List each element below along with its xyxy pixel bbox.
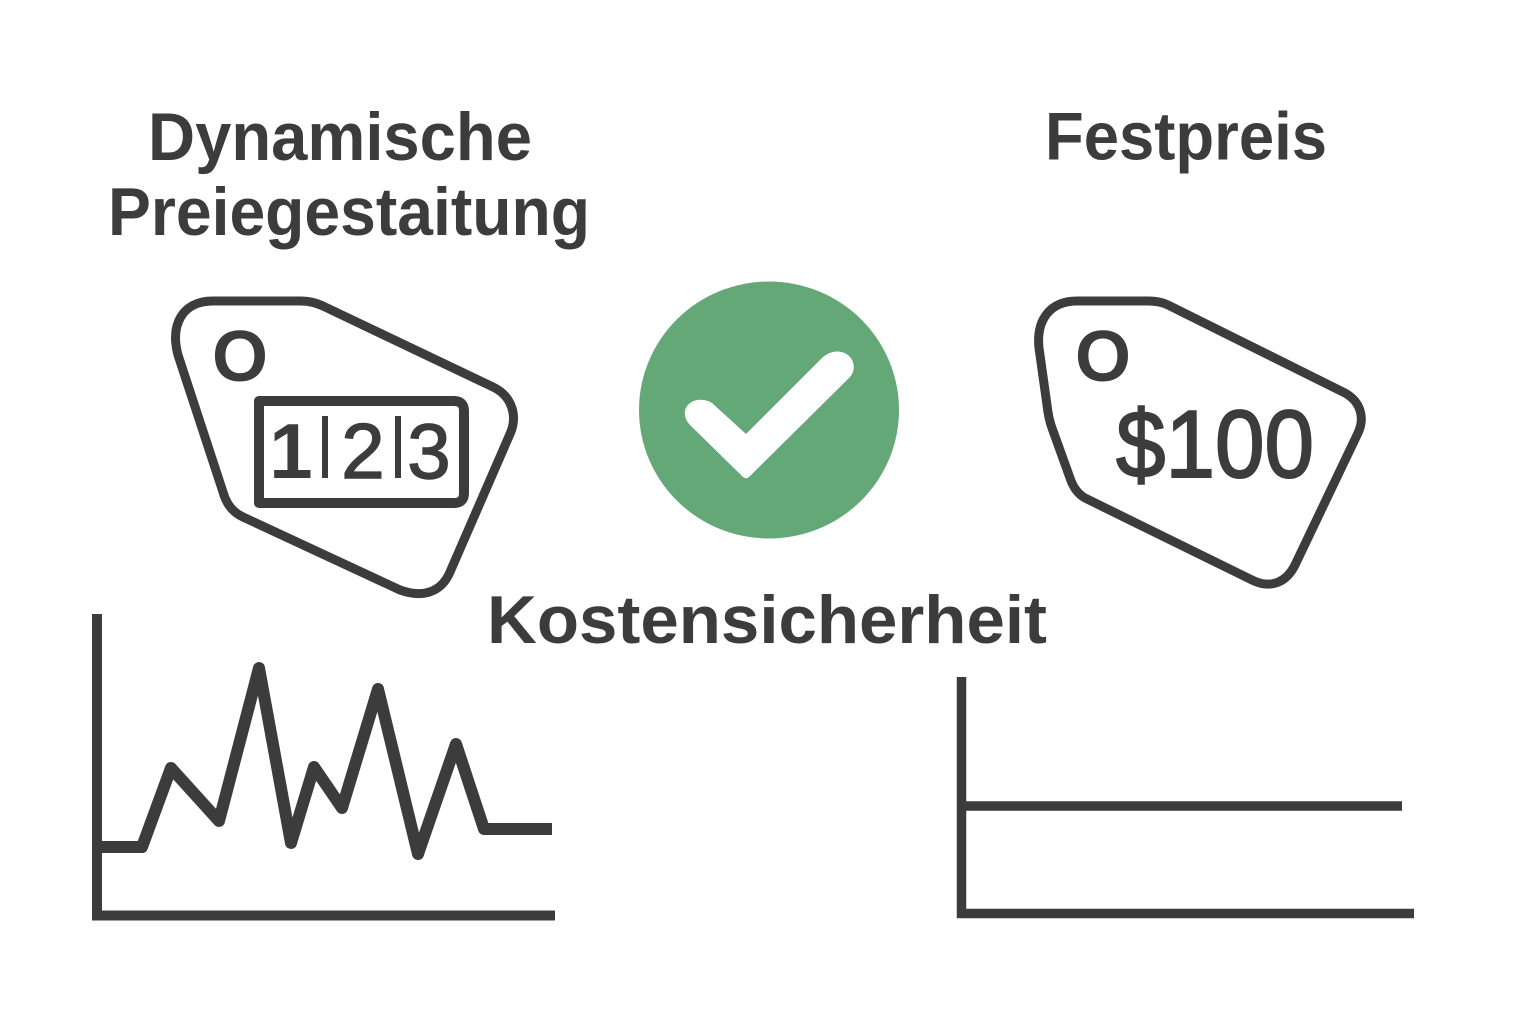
- heading: Kostensicherheit: Kostensicherheit: [487, 582, 1047, 658]
- icon: green check mark: [639, 282, 899, 538]
- tag hole: O: O: [1075, 317, 1131, 397]
- tier digit 1: 1: [269, 407, 313, 495]
- tag hole: O: O: [212, 317, 268, 397]
- heading: Dynamische Preiegestaitung: Preiegestaitung: [108, 174, 590, 250]
- chart: volatile dynamic price line: [97, 614, 555, 916]
- tier digit 3: 3: [407, 407, 451, 495]
- heading: Dynamische Preiegestaitung: Dynamische: [148, 99, 532, 175]
- icon: fixed price tag: [1039, 301, 1361, 584]
- price: $100: $100: [1116, 391, 1314, 498]
- price tier box: [259, 401, 464, 503]
- chart: flat fixed price line: [962, 677, 1414, 914]
- heading: Dynamische Preiegestaitung: [108, 99, 590, 250]
- tier digit 2: 2: [341, 407, 385, 495]
- icon: dynamic price tag: [176, 301, 513, 594]
- heading: Festpreis: Festpreis: [1045, 98, 1327, 174]
